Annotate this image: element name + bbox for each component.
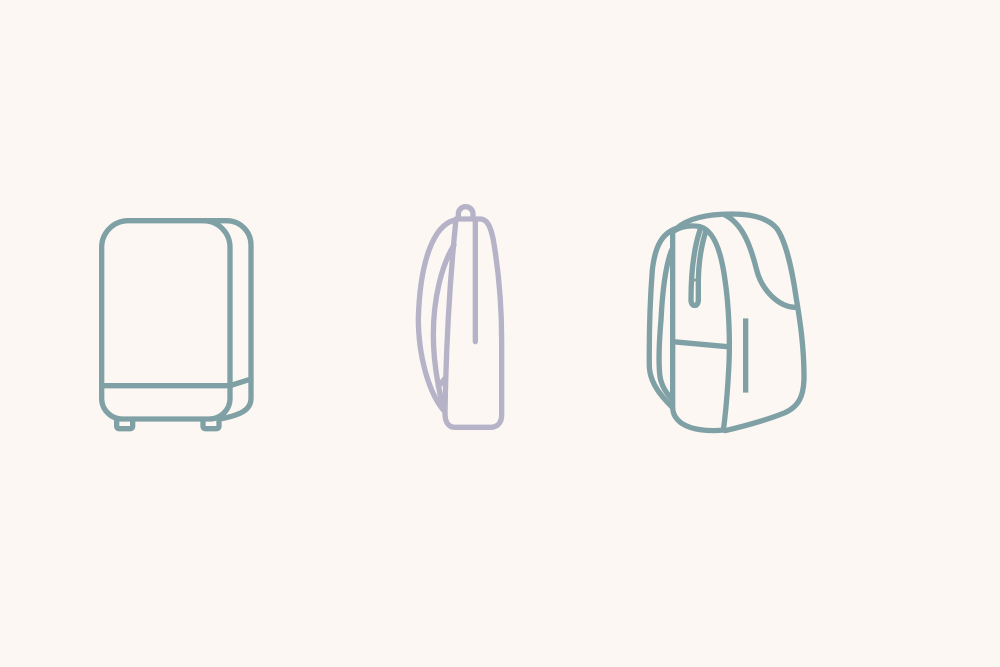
icon: backpack three-quarter view	[649, 214, 804, 431]
icon: backpack side view	[418, 207, 502, 427]
icon: backpack front view	[102, 221, 251, 429]
